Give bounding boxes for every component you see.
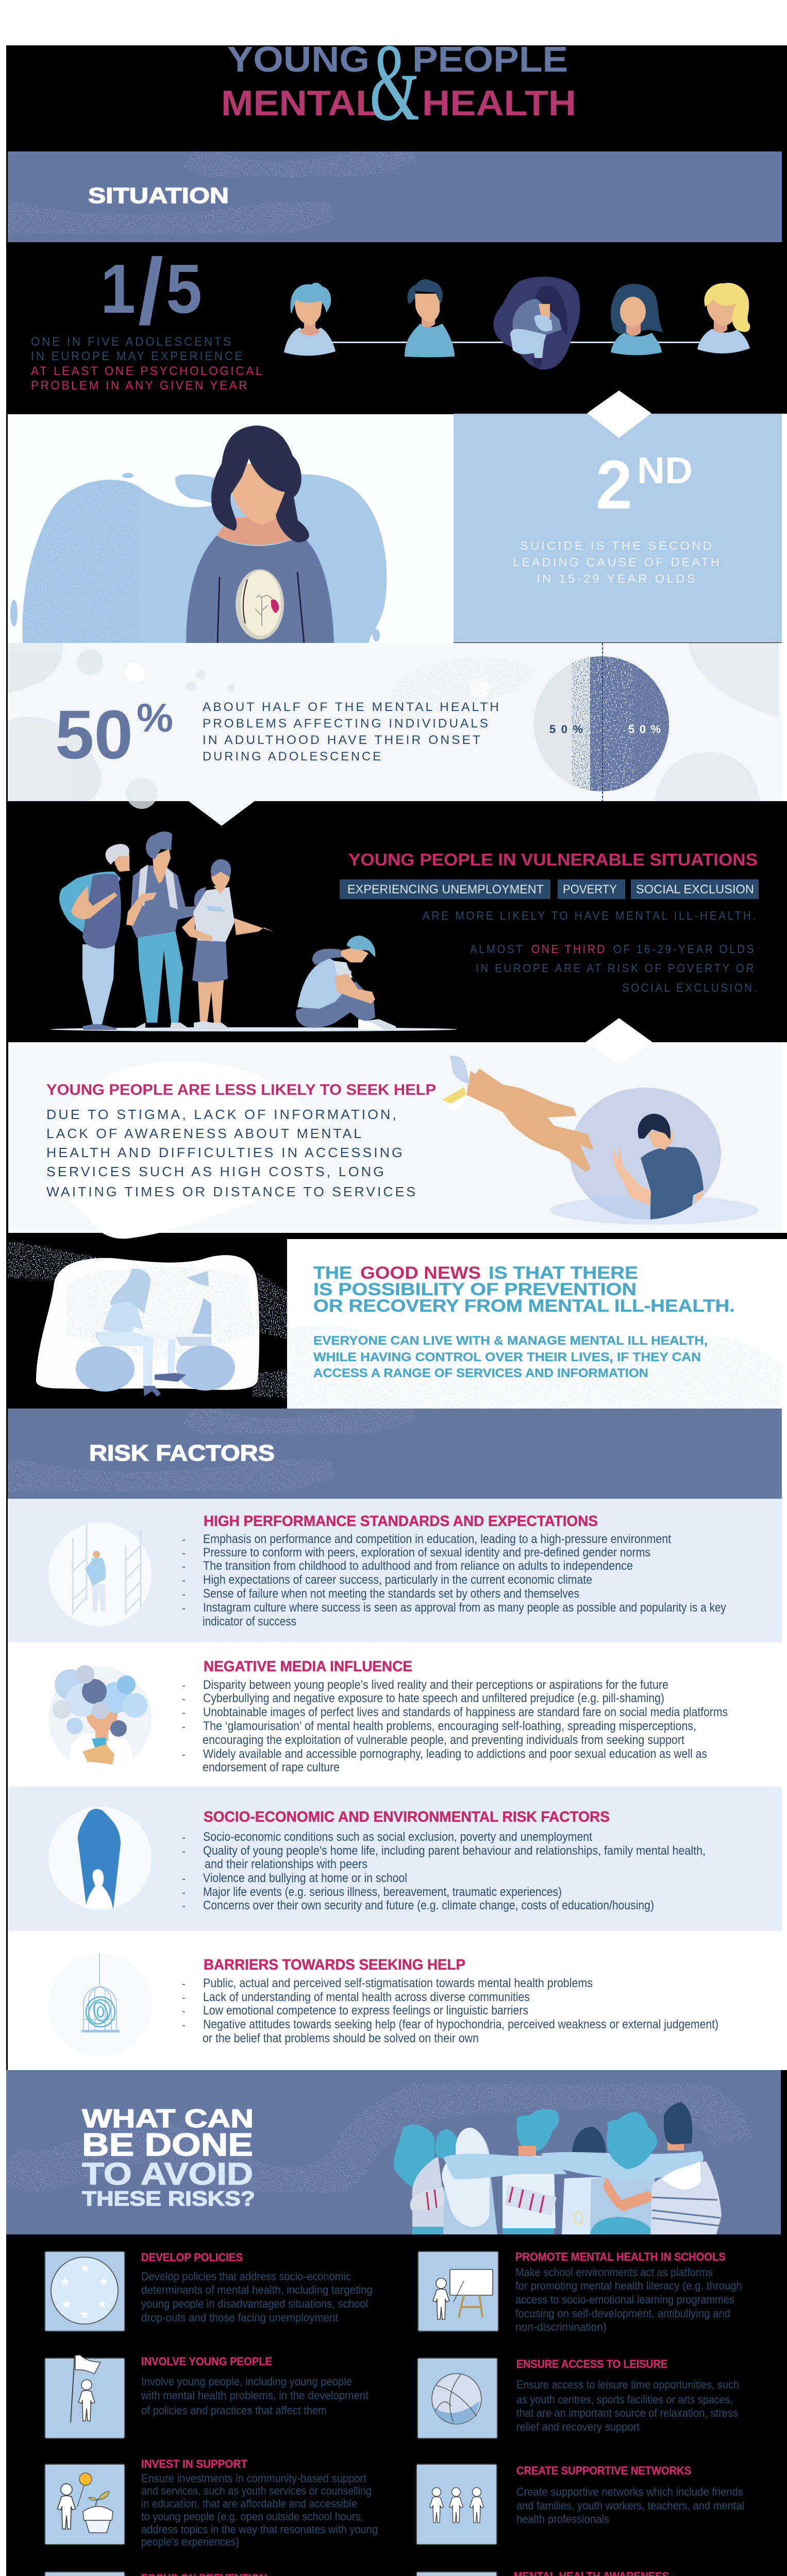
body	[141, 2375, 369, 2417]
heading: good news: OR RECOVERY FROM MENTAL ILL-HEALTH.	[313, 1296, 735, 1316]
title: YOUNG	[227, 39, 370, 79]
stat: one in five: /	[138, 240, 163, 344]
icon: adult shadow and child	[48, 1807, 152, 1910]
heading: DEVELOP POLICIES	[141, 2251, 243, 2264]
text: everyone can live	[313, 1334, 708, 1380]
body: address topics in the way that resonates with young	[141, 2523, 378, 2536]
decorative blobs	[22, 474, 387, 643]
list: -	[182, 1534, 186, 1546]
text: barriers: WAITING TIMES OR DISTANCE TO SERVICES	[46, 1184, 417, 1199]
heading: PROMOTE MENTAL HEALTH IN SCHOOLS	[515, 2250, 726, 2263]
icon: birdcage with scribble	[48, 1953, 152, 2056]
list: Sense of failure when not meeting the standards set by others and themselves	[203, 1587, 579, 1601]
icon: circle of stars	[45, 2251, 125, 2331]
body: and families, youth workers, teachers, and mental	[516, 2499, 744, 2512]
tags: unemployment, poverty, social exclusion: SOCIAL EXCLUSION	[636, 883, 754, 896]
text: half of problems: IN ADULTHOOD HAVE THEIR ONSET	[203, 733, 482, 747]
heading: what can be done: THESE RISKS?	[82, 2188, 255, 2210]
chart: half circle: 50%	[549, 723, 583, 736]
body	[141, 2472, 378, 2548]
body: Ensure access to leisure time opportunities, such	[516, 2378, 739, 2391]
body: Develop policies that address socio-economic	[141, 2270, 351, 2283]
text: barriers: LACK OF AWARENESS ABOUT MENTAL	[46, 1126, 363, 1141]
chart: half circle	[534, 643, 670, 801]
action: focus on prevention	[45, 2572, 358, 2576]
text: suicide description: LEADING CAUSE OF DEATH	[513, 555, 722, 569]
list	[182, 1678, 728, 1774]
list: The ‘glamourisation’ of mental health problems, encouraging self-loathing, spreading misperceptions,	[203, 1719, 696, 1733]
diamond connector 3	[585, 1018, 652, 1065]
text: everyone can live: ACCESS A RANGE OF SERVICES AND INFORMATION	[313, 1366, 648, 1380]
body	[516, 2378, 739, 2433]
list: -	[182, 2020, 186, 2031]
body: people’s experiences)	[141, 2535, 239, 2548]
text: vulnerable statistics: ALMOST	[470, 942, 524, 956]
icon: figure with scroll	[416, 2572, 497, 2576]
panel: fifty percent: %	[137, 695, 173, 740]
action: mental health awareness	[416, 2570, 758, 2576]
hair	[211, 426, 309, 543]
heading: good news: GOOD NEWS	[360, 1263, 481, 1283]
panel: woman illustration	[8, 414, 454, 643]
body: focusing on self-development, antibullying and	[515, 2307, 730, 2320]
pointing person	[182, 859, 274, 1029]
panel: suicide statistic: ND	[637, 450, 693, 492]
list: -	[182, 1693, 186, 1705]
action: involve young people	[45, 2355, 369, 2438]
illustration: isolated person in bubble reached by a hand	[442, 1056, 759, 1225]
text: vulnerable statistics	[423, 909, 759, 994]
list: -	[182, 1707, 186, 1719]
text: barriers: HEALTH AND DIFFICULTIES IN ACCESSING	[46, 1145, 405, 1160]
body: Ensure investments in community-based support	[141, 2472, 366, 2485]
list: -	[182, 1901, 186, 1912]
list: Disparity between young people’s lived reality and their perceptions or aspirations for the future	[203, 1678, 668, 1692]
text: barriers	[46, 1107, 417, 1199]
text: suicide description: IN 15-29 YEAR OLDS	[537, 572, 697, 585]
list: -	[182, 1873, 186, 1885]
banner: situation	[5, 149, 782, 242]
body: of policies and practices that affect them	[141, 2404, 327, 2417]
action: develop policies	[45, 2251, 373, 2331]
icon: figures holding telescope	[45, 2572, 125, 2576]
body: young people in disadvantaged situations, school	[141, 2297, 368, 2310]
body: drop-outs and those facing unemployment	[141, 2311, 338, 2324]
heading: what can be done: BE DONE	[82, 2127, 253, 2163]
illustration: group of young people and isolated youth	[50, 832, 457, 1031]
heading: good news: IS POSSIBILITY OF PREVENTION	[313, 1280, 637, 1299]
icon: person between ladders	[48, 1522, 152, 1626]
list: Violence and bullying at home or in school	[203, 1871, 407, 1885]
heading: HIGH PERFORMANCE STANDARDS AND EXPECTATIONS	[204, 1513, 598, 1530]
heading: INVOLVE YOUNG PEOPLE	[141, 2355, 272, 2368]
action: create supportive networks	[416, 2464, 744, 2545]
title: PEOPLE	[412, 39, 568, 79]
list: -	[182, 1887, 186, 1899]
body: Make school environments act as platforms	[515, 2266, 713, 2279]
heading: what can be done: WHAT CAN	[82, 2104, 254, 2133]
heading: INVEST IN SUPPORT	[141, 2458, 248, 2470]
stat: one in five: IN EUROPE MAY EXPERIENCE	[31, 349, 244, 363]
list: -	[182, 1992, 186, 2004]
list: Lack of understanding of mental health across diverse communities	[203, 1990, 530, 2004]
body: non-discrimination)	[515, 2320, 607, 2333]
list: Major life events (e.g. serious illness, bereavement, traumatic experiences)	[203, 1885, 562, 1899]
panel: barriers towards seeking help	[8, 1930, 782, 2070]
list: Widely available and accessible pornography, leading to addictions and poor sexual education as well as	[203, 1747, 707, 1761]
action: ensure access to leisure	[417, 2358, 739, 2438]
body: determinants of mental health, including targeting	[141, 2283, 373, 2296]
embroidery hoop	[236, 569, 284, 639]
heading: what can be done: TO AVOID	[82, 2157, 253, 2191]
body: health professionals	[516, 2513, 609, 2526]
title: MENTAL	[221, 83, 379, 123]
list	[182, 1830, 706, 1912]
heading: CREATE SUPPORTIVE NETWORKS	[516, 2464, 691, 2477]
heading: BARRIERS TOWARDS SEEKING HELP	[204, 1957, 465, 1973]
list: Concerns over their own security and future (e.g. climate change, costs of education/housing)	[203, 1899, 654, 1912]
body: that are an important source of relaxation, stress	[516, 2406, 738, 2419]
stat: one in five	[31, 240, 264, 393]
stat: 2nd: 2	[596, 447, 632, 523]
heading: ENSURE ACCESS TO LEISURE	[516, 2358, 667, 2370]
text: vulnerable statistics: SOCIAL EXCLUSION.	[622, 981, 759, 994]
list: -	[182, 1978, 186, 1990]
text: half of problems: DURING ADOLESCENCE	[203, 750, 383, 764]
panel: the good news	[273, 1239, 787, 1412]
body	[515, 2266, 742, 2333]
list: -	[182, 1575, 186, 1586]
tags: unemployment, poverty, social exclusion: EXPERIENCING UNEMPLOYMENT	[347, 883, 544, 896]
tags: unemployment, poverty, social exclusion: POVERTY	[563, 883, 617, 896]
tags: unemployment, poverty, social exclusion	[340, 879, 759, 899]
list: Cyberbullying and negative exposure to hate speech and unfiltered prejudice (e.g. pill-shaming)	[203, 1691, 664, 1705]
heading: good news: THE	[313, 1263, 352, 1283]
stat: one in five: ONE IN FIVE ADOLESCENTS	[31, 335, 233, 349]
icon: figure at whiteboard	[418, 2251, 498, 2331]
stat: one in five: AT LEAST ONE PSYCHOLOGICAL	[31, 364, 264, 378]
list: indicator of success	[203, 1615, 296, 1629]
list: or the belief that problems should be solved on their own	[203, 2031, 479, 2045]
text: vulnerable statistics: ARE MORE LIKELY TO HAVE MENTAL ILL-HEALTH.	[423, 909, 758, 922]
chart: half circle: 50%	[628, 723, 661, 736]
text: everyone can live: WHILE HAVING CONTROL OVER THEIR LIVES, IF THEY CAN	[313, 1350, 701, 1364]
heading: good news	[313, 1263, 735, 1316]
heading: good news: IS THAT THERE	[489, 1263, 638, 1283]
list: Pressure to conform with peers, exploration of sexual identity and pre-defined gender norms	[203, 1546, 650, 1560]
body: relief and recovery support	[516, 2420, 640, 2433]
text: suicide description	[513, 539, 722, 585]
stat: one in five: PROBLEM IN ANY GIVEN YEAR	[31, 379, 249, 393]
stat: one in five: 5	[166, 250, 202, 328]
text: half of problems: ABOUT HALF OF THE MENTAL HEALTH	[203, 700, 501, 714]
title	[221, 21, 576, 144]
icon: figure with flag	[45, 2355, 125, 2438]
panel: high performance standards	[8, 1499, 782, 1642]
body	[516, 2485, 744, 2526]
sweater	[186, 536, 334, 643]
icon: figure, sun balloon and plant	[45, 2464, 125, 2545]
list: Negative attitudes towards seeking help (fear of hypochondria, perceived weakness or external judgement)	[203, 2018, 718, 2031]
list: -	[182, 1832, 186, 1843]
list: Unobtainable images of perfect lives and standards of happiness are standard fare on social media platforms	[203, 1705, 728, 1719]
panel: less likely to seek help	[8, 1042, 782, 1239]
stat: one in five: 1	[101, 250, 136, 328]
list: -	[182, 1589, 186, 1600]
icon: head of speech bubbles with phone	[48, 1665, 152, 1771]
list: Public, actual and perceived self-stigmatisation towards mental health problems	[203, 1976, 593, 1990]
central person	[126, 832, 207, 1029]
panel: fifty percent	[8, 643, 782, 809]
body: Involve young people, including young people	[141, 2375, 352, 2388]
panel: suicide statistic	[454, 414, 782, 642]
list: endorsement of rape culture	[203, 1760, 340, 1774]
text: suicide description: SUICIDE IS THE SECOND	[520, 539, 714, 552]
stat: 50%: 50	[55, 697, 133, 773]
text: half of problems: PROBLEMS AFFECTING INDIVIDUALS	[203, 717, 490, 731]
body: access to socio-emotional learning programmes	[515, 2293, 734, 2306]
heading: risk factors: RISK FACTORS	[89, 1440, 275, 1466]
body: for promoting mental health literacy (e.g. through	[515, 2279, 742, 2292]
text: everyone can live: EVERYONE CAN LIVE WITH & MANAGE MENTAL ILL HEALTH,	[313, 1334, 708, 1348]
body	[141, 2270, 373, 2324]
list: -	[182, 1721, 186, 1733]
list: -	[182, 2006, 186, 2017]
body: and services, such as youth services or counselling	[141, 2484, 372, 2497]
text: barriers: DUE TO STIGMA, LACK OF INFORMATION,	[46, 1107, 398, 1122]
body: with mental health problems, in the development	[141, 2389, 369, 2402]
list: Emphasis on performance and competition in education, leading to a high-pressure environment	[203, 1532, 671, 1546]
icon: three linked figures	[416, 2464, 497, 2545]
panel: socio-economic factors	[8, 1787, 782, 1930]
list: -	[182, 1603, 186, 1614]
title: HEALTH	[422, 83, 576, 123]
icon: ball	[417, 2358, 497, 2438]
arrow connector 2	[189, 801, 255, 826]
list: Low emotional competence to express feelings or linguistic barriers	[203, 2004, 528, 2018]
panel: negative media influence	[8, 1642, 782, 1787]
text: vulnerable statistics: ONE THIRD	[531, 942, 607, 956]
list: -	[182, 1749, 186, 1760]
list: Quality of young people’s home life, including parent behaviour and relationships, family mental health,	[203, 1844, 706, 1858]
list: and their relationships with peers	[205, 1857, 367, 1871]
list: -	[182, 1548, 186, 1559]
banner: risk factors	[5, 1406, 782, 1499]
list: High expectations of career success, particularly in the current economic climate	[203, 1573, 592, 1587]
text: vulnerable statistics: IN EUROPE ARE AT RISK OF POVERTY OR	[476, 961, 756, 975]
heading: vulnerable situations: YOUNG PEOPLE IN VULNERABLE SITUATIONS	[348, 850, 758, 869]
illustration: friends hugging	[394, 2102, 722, 2234]
illustration: two people talking on exercise balls	[8, 1242, 289, 1399]
list: The transition from childhood to adulthood and from reliance on adults to independence	[203, 1559, 633, 1573]
heading: NEGATIVE MEDIA INFLUENCE	[204, 1658, 412, 1675]
body: to young people (e.g. open outside school hours,	[141, 2510, 363, 2523]
body: as youth centres, sports facilities or arts spaces,	[516, 2393, 733, 2406]
heading: SOCIO-ECONOMIC AND ENVIRONMENTAL RISK FACTORS	[204, 1809, 610, 1825]
figure in distress	[494, 277, 580, 369]
title: &	[370, 21, 420, 144]
list: Socio-economic conditions such as social exclusion, poverty and unemployment	[203, 1830, 592, 1844]
sitting person	[296, 936, 396, 1029]
diamond connector 1	[587, 391, 651, 438]
text: barriers: SERVICES SUCH AS HIGH COSTS, LONG	[46, 1164, 386, 1179]
action: promote mental health in schools	[418, 2250, 742, 2333]
body: in education, that are affordable and accessible	[141, 2497, 357, 2510]
heading: situation: SITUATION	[88, 183, 229, 208]
list: -	[182, 1561, 186, 1572]
list: encouraging the exploitation of vulnerable people, and preventing individuals from seeking support	[203, 1733, 684, 1747]
heading: what can be done	[82, 2104, 255, 2210]
body: Create supportive networks which include friends	[516, 2485, 743, 2498]
text: half of problems	[203, 700, 501, 764]
list	[182, 1976, 718, 2045]
banner: what can be done	[6, 2070, 781, 2234]
illustration: row of five young people	[284, 277, 750, 369]
list: Instagram culture where success is seen as approval from as many people as possible and popularity is a key	[203, 1601, 726, 1615]
list	[182, 1532, 726, 1629]
list: -	[182, 1846, 186, 1857]
person with backpack	[59, 844, 130, 1030]
heading: seek help: YOUNG PEOPLE ARE LESS LIKELY TO SEEK HELP	[46, 1081, 436, 1098]
text: vulnerable statistics: OF 16-29-YEAR OLDS	[613, 942, 756, 956]
list: -	[182, 1680, 186, 1691]
action: invest in support	[45, 2458, 378, 2548]
